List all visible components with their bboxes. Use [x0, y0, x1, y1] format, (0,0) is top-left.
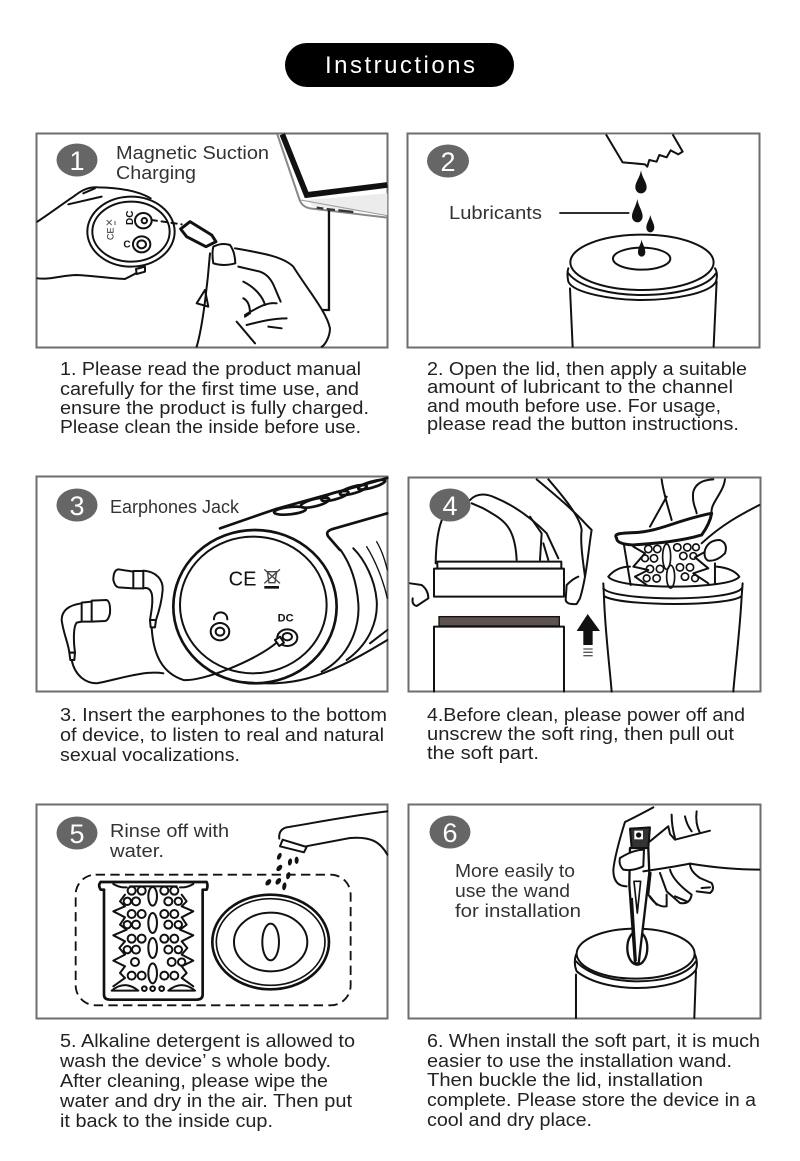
badge: 3: 3: [69, 491, 85, 521]
arrow: pull up: [577, 614, 600, 656]
panel: step 1 magnetic charging: [36, 134, 388, 348]
caption: step 4: [427, 705, 745, 763]
label: lubricants: Lubricants: [449, 203, 542, 223]
caption: step 5: After cleaning, please wipe the: [60, 1071, 328, 1091]
caption: step 6: easier to use the installation wand.: [427, 1051, 732, 1071]
caption: step 5: [59, 1031, 355, 1131]
icon: earphones: [62, 569, 277, 683]
caption: step 5: water and dry in the air. Then put: [59, 1091, 352, 1111]
label: magnetic suction charging: Magnetic Suction: [116, 143, 269, 163]
badge: 2: 2: [440, 147, 456, 177]
caption: step 2: please read the button instructions.: [427, 414, 739, 434]
title: [285, 43, 514, 87]
icon: water drops: [264, 852, 299, 891]
label: wand note: for installation: [455, 901, 581, 921]
label: wand note: [455, 861, 581, 921]
badge: 3: [56, 488, 98, 522]
icon: device base: [87, 197, 182, 267]
icon: wand in opening: [627, 827, 650, 965]
caption: step 3: sexual vocalizations.: [60, 745, 240, 765]
pointer line: [559, 210, 629, 215]
caption: step 2: amount of lubricant to the channel: [427, 377, 733, 397]
icon: drops: [632, 170, 654, 257]
panel: step 2 lubricants: [408, 134, 760, 348]
caption: step 2: [427, 359, 747, 434]
icon: right cup with soft part: [603, 479, 759, 692]
icon: DC port with plug: [275, 613, 297, 646]
badge: 5: [56, 816, 98, 850]
badge: 6: [430, 816, 470, 848]
icon: device base: CE: [105, 228, 115, 240]
badge: 5: 5: [69, 819, 85, 849]
icon: CE and recycling marks: CE: [229, 568, 256, 590]
label: rinse off with water: [109, 821, 229, 861]
caption: step 3: of device, to listen to real and natural: [60, 725, 384, 745]
icon: DC port with plug: DC: [278, 613, 294, 625]
badge: 4: [430, 488, 470, 522]
caption: step 6: [427, 1031, 760, 1130]
caption: step 3: [60, 705, 387, 765]
icon: left cup and lid with hand: [410, 479, 592, 692]
panel: step 4 removing the soft part: [408, 478, 760, 692]
label: rinse off with water: water.: [109, 841, 164, 861]
panel: step 6 installation wand: [408, 804, 760, 1018]
caption: step 5: it back to the inside cup.: [60, 1111, 273, 1131]
caption: step 5: wash the device’ s whole body.: [59, 1051, 331, 1071]
caption: step 1: [60, 359, 369, 437]
icon: right hand: [197, 244, 330, 347]
label: earphones jack: Earphones Jack: [110, 497, 240, 517]
caption: step 5: 5. Alkaline detergent is allowed to: [60, 1031, 355, 1051]
caption: step 6: Then buckle the lid, installation: [427, 1070, 703, 1090]
icon: device base: C: [123, 240, 131, 251]
icon: cup: [575, 929, 697, 1018]
icon: laptop: [277, 134, 387, 218]
icon: sachet: [606, 134, 683, 167]
label: wand note: use the wand: [455, 881, 570, 901]
icon: device base: DC: [125, 211, 136, 225]
label: rinse off with water: Rinse off with: [110, 821, 229, 841]
caption: step 2: and mouth before use. For usage,: [427, 396, 721, 416]
badge: 6: 6: [442, 818, 458, 848]
badge: 2: [427, 144, 469, 178]
caption: step 6: complete. Please store the device in a: [427, 1090, 757, 1110]
caption: step 1: 1. Please read the product manual: [60, 359, 361, 379]
caption: step 4: 4.Before clean, please power off and: [427, 705, 745, 725]
icon: round insert end: [212, 895, 329, 989]
caption: step 2: 2. Open the lid, then apply a suitable: [427, 359, 747, 379]
icon: hand holding wand: [613, 807, 759, 907]
icon: left hand holding device: [37, 187, 151, 279]
icon: cup with open lid: [567, 235, 717, 347]
dashed outline: [76, 875, 351, 1005]
badge: 1: 1: [69, 146, 85, 176]
icon: soft insert: [99, 882, 207, 1000]
icon: device body: [173, 478, 387, 683]
label: wand note: More easily to: [455, 861, 575, 881]
badge: 1: [56, 144, 98, 176]
panel: step 5 rinse with water: [36, 804, 388, 1018]
caption: step 6: 6. When install the soft part, it is much: [427, 1031, 760, 1051]
icon: cable plug: [181, 222, 216, 247]
icon: CE and recycling marks: [229, 568, 280, 590]
caption: step 6: cool and dry place.: [427, 1110, 592, 1130]
label: magnetic suction charging: [116, 143, 269, 183]
caption: step 4: the soft part.: [427, 743, 539, 763]
panel: step 3 earphones jack: [36, 476, 388, 692]
title: Instructions: [325, 52, 475, 79]
icon: faucet: [279, 811, 387, 855]
label: magnetic suction charging: Charging: [116, 163, 196, 183]
caption: step 1: Please clean the inside before use.: [60, 417, 361, 437]
caption: step 4: unscrew the soft ring, then pull out: [427, 724, 734, 744]
icon: headphone port: [211, 612, 229, 640]
caption: step 1: ensure the product is fully charged.: [60, 398, 369, 418]
badge: 4: 4: [442, 491, 458, 521]
caption: step 3: 3. Insert the earphones to the bottom: [60, 705, 387, 725]
caption: step 1: carefully for the first time use, and: [60, 379, 359, 399]
icon: charging cable: [322, 210, 329, 310]
